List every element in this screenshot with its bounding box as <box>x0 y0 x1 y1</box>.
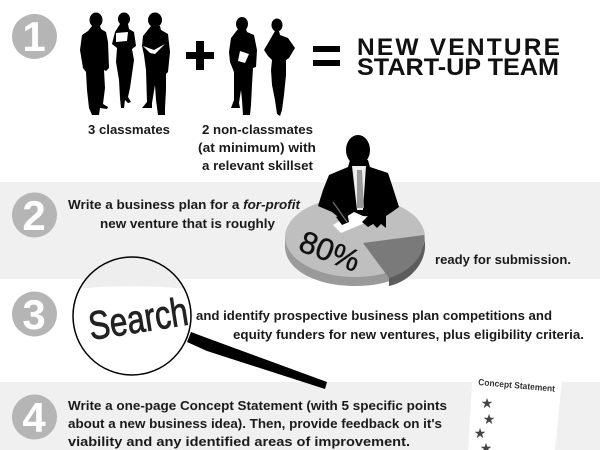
step 3 text <box>196 309 584 342</box>
number badge 1 <box>12 13 57 60</box>
step 2 text: Write a business plan for a for-profit <box>68 198 301 212</box>
icon: magnifying glass <box>70 250 327 389</box>
pie chart 80% <box>285 197 425 286</box>
step 2: business plan <box>12 135 571 286</box>
step 1: team equation <box>12 12 560 173</box>
plus sign <box>186 41 214 70</box>
equals sign <box>313 46 340 66</box>
caption: 2 non-classmates: 2 non-classmates <box>202 123 313 137</box>
caption: 2 non-classmates <box>198 123 316 173</box>
icon: magnifying glass: Search <box>86 290 191 349</box>
step 3 text: equity funders for new ventures, plus eligibility criteria. <box>233 328 584 342</box>
concept statement document: Concept Statement <box>478 377 555 394</box>
step 4 text: about a new business idea). Then, provide feedback on it's <box>68 417 442 431</box>
star icons: ★ <box>483 411 495 427</box>
step 2 text: new venture that is roughly <box>100 217 275 231</box>
star icons: ★ <box>474 425 486 441</box>
step 4: concept statement <box>12 370 562 450</box>
step 4 text <box>68 399 447 449</box>
step 3 text: and identify prospective business plan competitions and <box>196 309 552 323</box>
number badge 2: 2 <box>22 192 46 239</box>
step 3: search <box>12 250 584 389</box>
title: START-UP TEAM <box>357 54 559 81</box>
number badge 3 <box>12 291 57 338</box>
title <box>357 34 560 81</box>
step 4 text: viability and any identified areas of improvement. <box>68 435 410 449</box>
ready for submission text: ready for submission. <box>435 253 571 267</box>
step 4 text: Write a one-page Concept Statement (with 5 specific points <box>68 399 447 413</box>
number badge 4: 4 <box>22 394 46 441</box>
number badge 2 <box>12 192 57 239</box>
icon: businessman writing <box>318 135 399 233</box>
caption: 3 classmates: 3 classmates <box>88 123 170 137</box>
icon: two non-classmates silhouettes <box>229 17 295 116</box>
icon: paper and book held by classmates <box>116 32 165 54</box>
icon: three classmates silhouettes <box>80 12 170 115</box>
star icons <box>474 395 495 450</box>
number badge 1: 1 <box>22 13 46 60</box>
number badge 4 <box>12 394 57 441</box>
step 2 text <box>68 198 301 231</box>
number badge 3: 3 <box>22 291 46 338</box>
icon: paper held by non-classmate <box>238 51 249 63</box>
title: NEW VENTURE <box>357 34 560 61</box>
caption: 2 non-classmates: (at minimum) with <box>198 141 316 155</box>
star icons: ★ <box>481 395 493 411</box>
pie chart 80%: 80% <box>294 224 365 279</box>
caption: 2 non-classmates: a relevant skillset <box>202 159 314 173</box>
concept statement document <box>468 370 562 450</box>
